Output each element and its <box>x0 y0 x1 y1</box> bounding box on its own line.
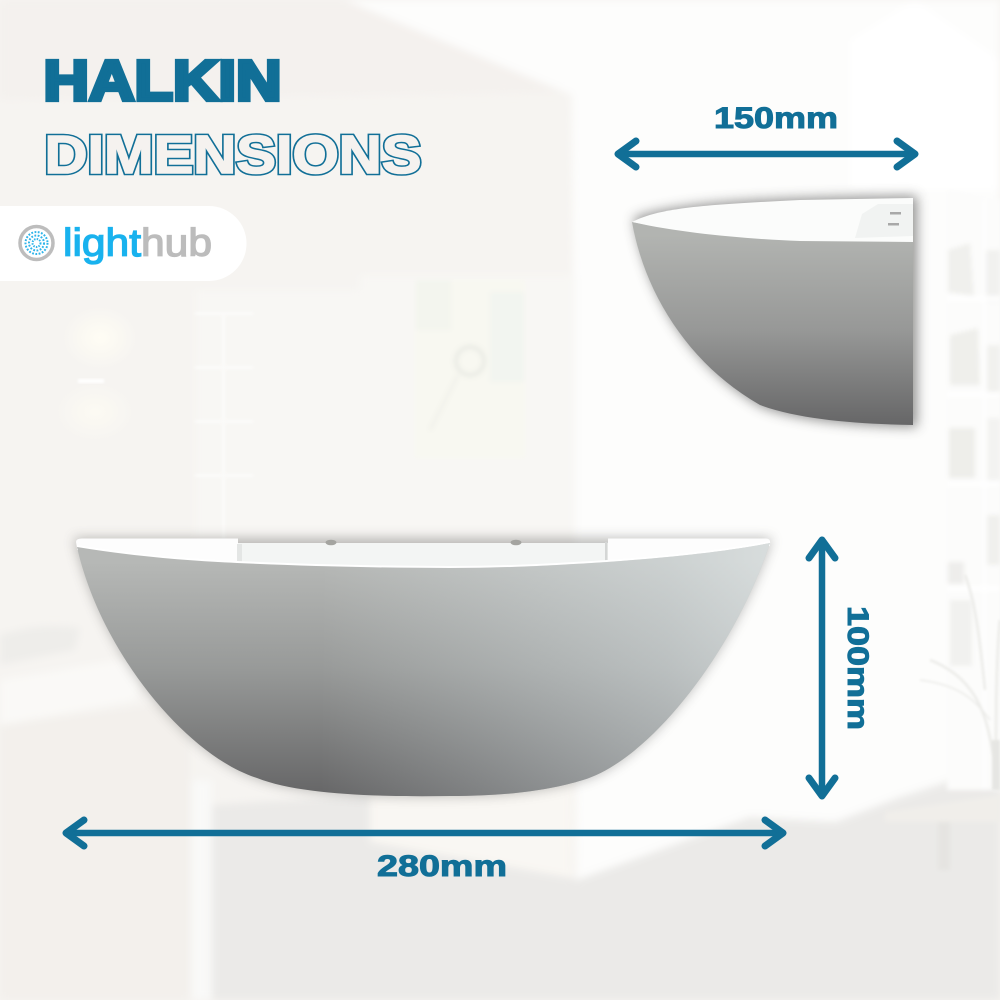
large bowl: front view <box>74 538 772 796</box>
front rim highlight <box>77 541 770 571</box>
rim interior <box>632 198 913 243</box>
faint shelving on the left wall <box>195 312 253 540</box>
plant silhouette <box>920 575 1000 790</box>
screw left <box>326 540 336 545</box>
title: HALKIN: HALKIN <box>44 49 282 113</box>
logo pill: lighthub <box>0 206 246 281</box>
label: 280mm: 280mm <box>377 850 507 883</box>
label: 150mm: 150mm <box>714 102 838 135</box>
faint wall painting <box>415 280 525 458</box>
bowl right-side light <box>77 543 770 796</box>
subtitle: DIMENSIONS outlined: DIMENSIONS <box>44 125 422 185</box>
rim interior left and right <box>76 538 238 565</box>
bracket detail <box>855 204 913 238</box>
small bowl: side view <box>632 196 917 427</box>
screw right <box>510 540 522 545</box>
bookcase <box>947 190 1000 790</box>
subtitle: DIMENSIONS outlined: DIMENSIONS <box>44 125 422 185</box>
bowl body <box>632 222 913 425</box>
icon: logo rings <box>20 226 53 260</box>
coffee table on the floor <box>885 795 1000 870</box>
back mounting panel <box>238 543 608 568</box>
logo wordmark: lighthub <box>63 222 212 265</box>
arrow: 280mm width <box>66 820 783 846</box>
arrow: 150mm width <box>618 141 915 167</box>
lamp glows <box>55 306 138 442</box>
bowl body <box>77 543 770 796</box>
arrow: 100mm height <box>809 540 835 796</box>
label: 100mm rotated: 100mm <box>841 606 874 730</box>
